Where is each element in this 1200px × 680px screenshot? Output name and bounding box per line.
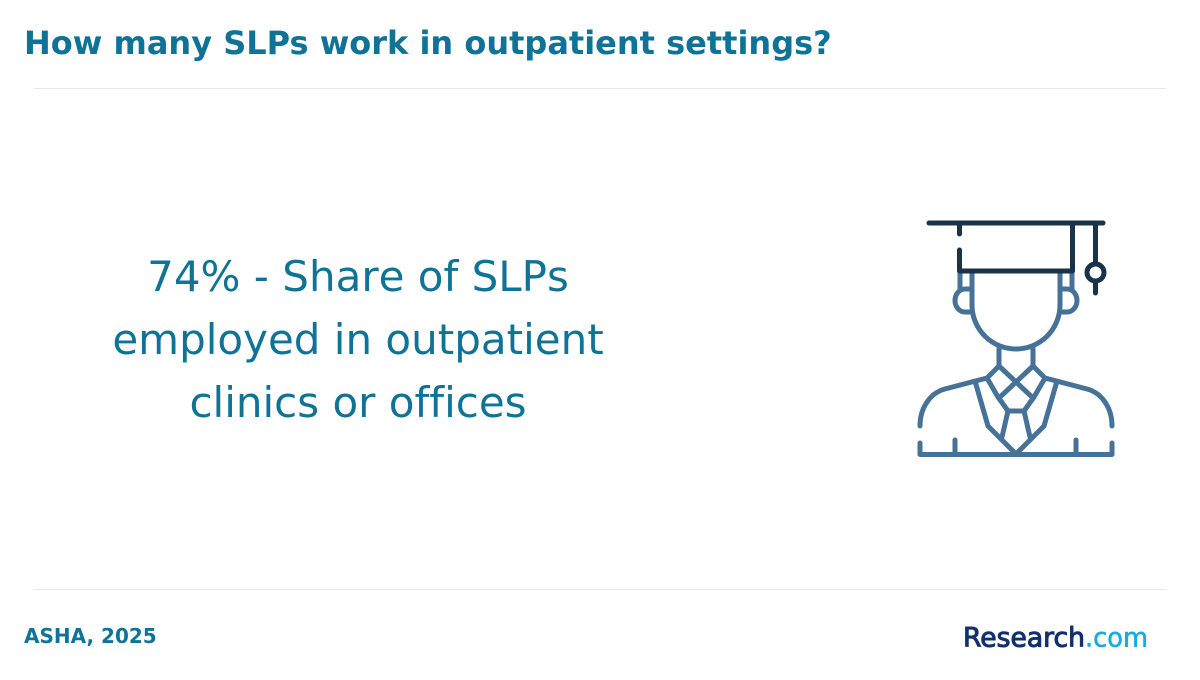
logo: Research.com xyxy=(963,622,1148,654)
main statistic text: 74% - Share of SLPs xyxy=(147,252,569,301)
main statistic text: clinics or offices xyxy=(189,378,527,427)
logo: Research.com: Research xyxy=(963,622,1085,654)
icon: graduate with mortarboard xyxy=(918,220,1114,457)
source label: ASHA, 2025 xyxy=(24,624,157,648)
icon part: mortarboard cap xyxy=(929,223,1104,293)
title: How many SLPs work in outpatient settings? xyxy=(24,24,832,62)
icon part: graduate body xyxy=(920,272,1112,454)
logo: Research.com: .com xyxy=(1085,622,1148,654)
main statistic text xyxy=(112,252,604,427)
main statistic text: employed in outpatient xyxy=(112,315,604,364)
